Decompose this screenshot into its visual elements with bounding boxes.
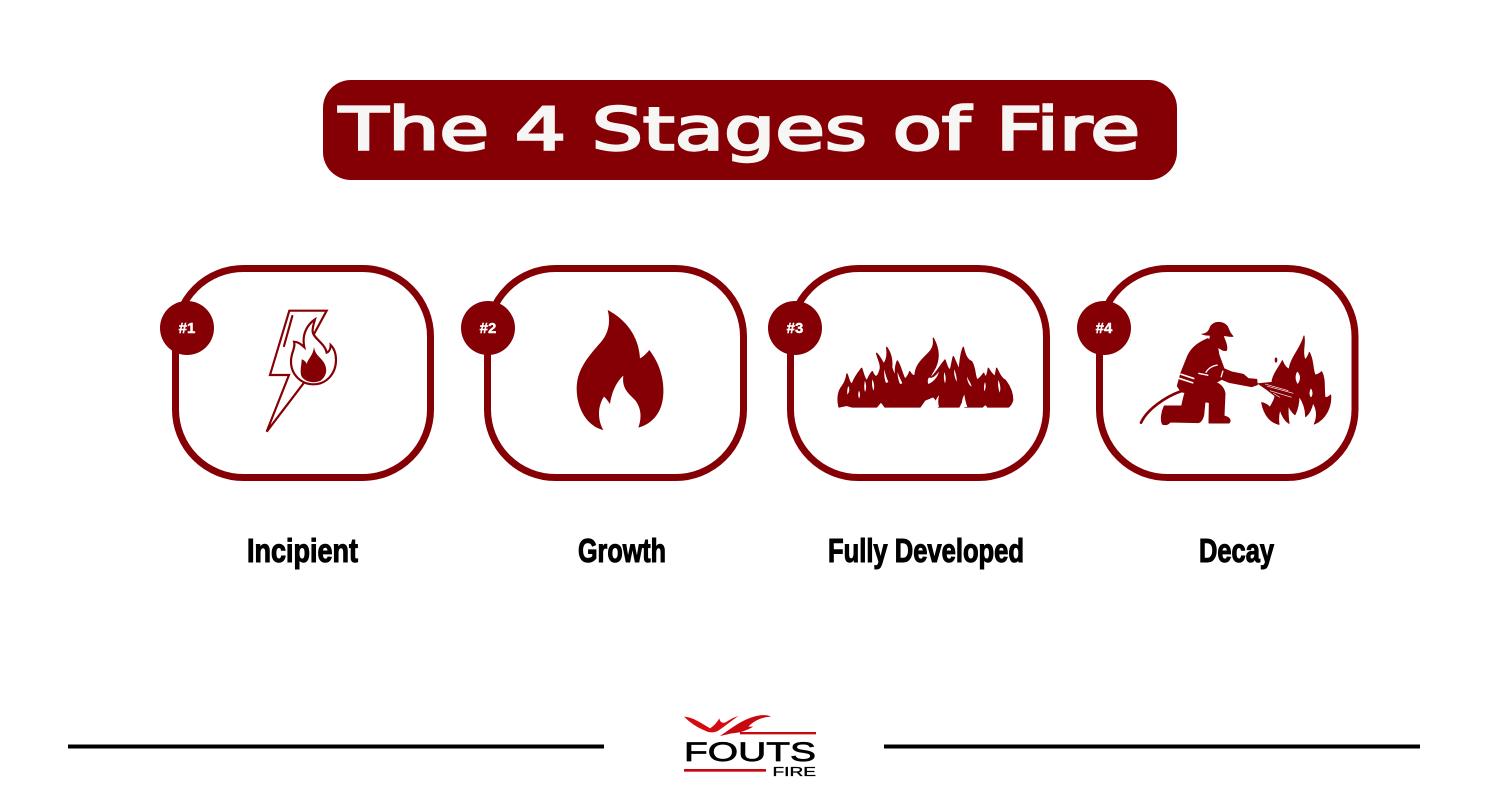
- badge: #4: #4: [1096, 320, 1113, 337]
- label: growth: Growth: [578, 533, 666, 570]
- badge: #4: [1077, 301, 1131, 355]
- logo: Fouts Fire: [684, 715, 816, 779]
- icon: firefighter spraying flames: [1141, 322, 1331, 425]
- logo wings: [684, 715, 816, 772]
- label: decay: Decay: [1199, 533, 1274, 570]
- badge: #3: #3: [787, 320, 803, 337]
- logo: Fouts Fire: FIRE: [772, 764, 816, 779]
- badge: #3: [768, 301, 822, 355]
- footer line right: [884, 744, 1420, 748]
- title: [323, 80, 1177, 180]
- panel: fully developed: [768, 268, 1046, 478]
- icon: flame: [577, 310, 663, 430]
- badge: #2: [461, 301, 515, 355]
- logo: Fouts Fire: FOUTS: [684, 737, 816, 767]
- badge: #1: [160, 301, 214, 355]
- icon: wall of flames: [838, 338, 1013, 407]
- label: incipient: Incipient: [247, 533, 358, 570]
- badge: #2: #2: [480, 320, 496, 337]
- panel: decay: [1077, 268, 1355, 478]
- icon: lightning bolt with flame: [267, 311, 336, 432]
- badge: #1: #1: [179, 320, 195, 337]
- title: The 4 Stages of Fire: [338, 96, 1140, 164]
- panel: incipient: [160, 268, 430, 478]
- panel: growth: [461, 268, 744, 478]
- label: fully developed: Fully Developed: [828, 533, 1024, 570]
- footer line left: [68, 744, 604, 748]
